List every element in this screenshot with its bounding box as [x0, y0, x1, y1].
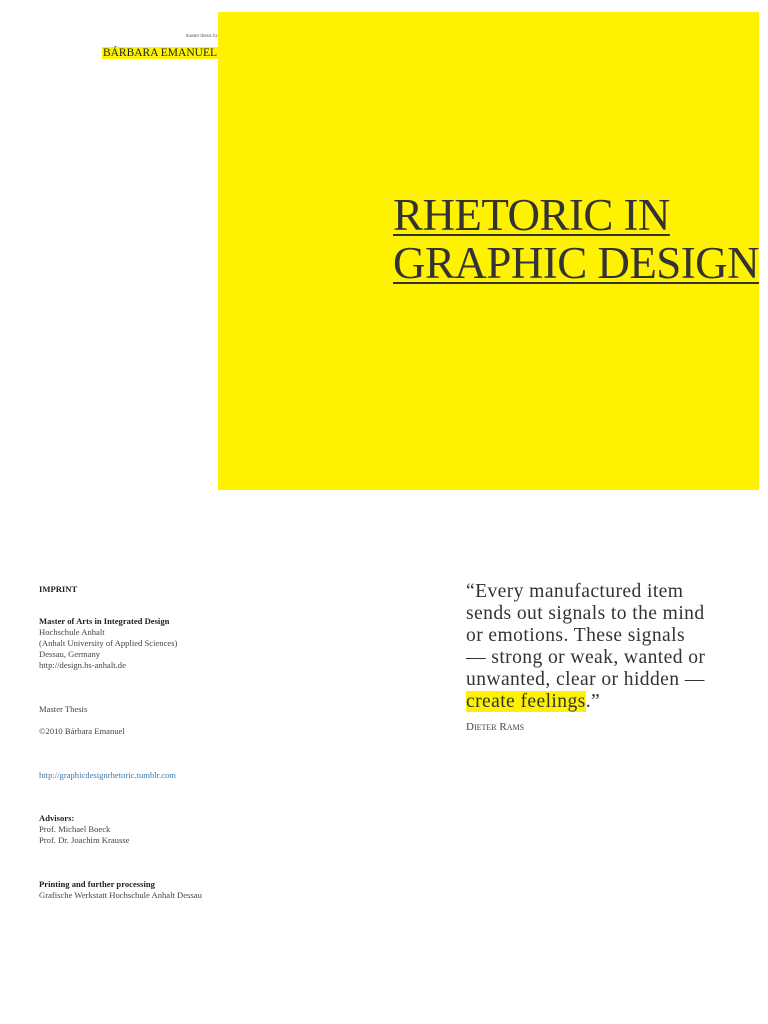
imprint text block: Printing and further processing: [39, 879, 155, 889]
panel: yellow cover: [218, 12, 759, 490]
imprint text block: Dessau, Germany: [39, 649, 100, 659]
imprint text block: Prof. Michael Boeck: [39, 824, 110, 834]
imprint text block: IMPRINT: [39, 584, 77, 594]
imprint text block: Hochschule Anhalt: [39, 627, 105, 637]
title: GRAPHIC DESIGN: [393, 238, 759, 288]
imprint text block: Advisors:: [39, 813, 74, 823]
quote: or emotions. These signals: [466, 625, 685, 646]
imprint text block: Master of Arts in Integrated Design: [39, 616, 169, 626]
quote: sends out signals to the mind: [466, 603, 705, 624]
title: [393, 190, 760, 288]
quote author: Dieter Rams: [466, 721, 524, 733]
imprint text block: Prof. Dr. Joachim Krausse: [39, 835, 129, 845]
imprint text block: Grafische Werkstatt Hochschule Anhalt Dessau: [39, 890, 202, 900]
title: RHETORIC IN: [393, 190, 670, 240]
quote: [466, 581, 705, 712]
author label: master thesis by: [186, 34, 218, 39]
imprint text block: [39, 584, 202, 900]
quote: unwanted, clear or hidden —: [466, 669, 705, 690]
imprint text block: Master Thesis: [39, 704, 87, 714]
imprint text block: http://graphicdesignrhetoric.tumblr.com: [39, 770, 176, 780]
quote: “Every manufactured item: [466, 581, 683, 602]
quote: — strong or weak, wanted or: [466, 647, 705, 668]
quote: create feelings.”: [466, 691, 600, 712]
imprint text block: ©2010 Bárbara Emanuel: [39, 726, 125, 736]
author label: BÁRBARA EMANUEL: [103, 47, 217, 59]
author label: [102, 34, 218, 59]
imprint text block: (Anhalt University of Applied Sciences): [39, 638, 177, 648]
imprint text block: http://design.hs-anhalt.de: [39, 660, 126, 670]
